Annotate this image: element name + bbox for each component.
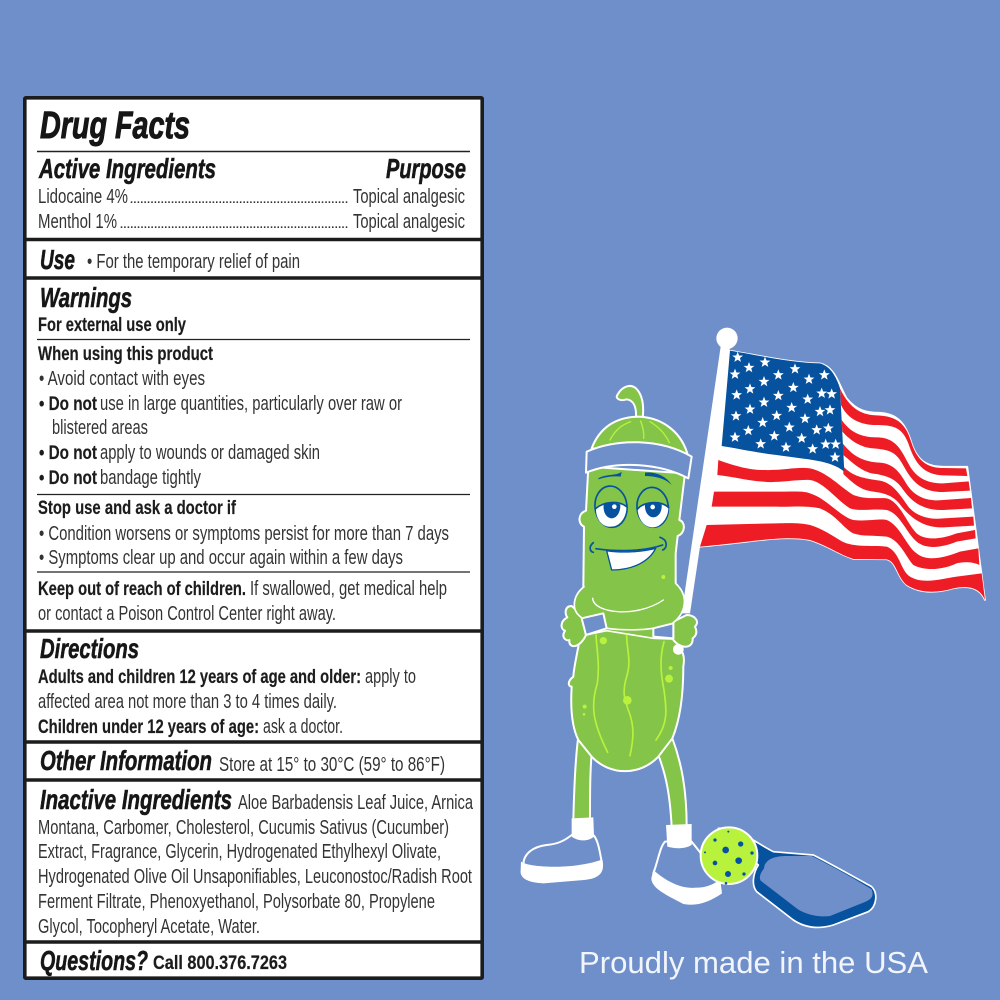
section: directions: Children under 12 years of age: — [38, 716, 259, 738]
panel: drug facts label — [25, 98, 482, 978]
section: warnings: If swallowed, get medical help — [250, 578, 447, 600]
section: directions: ask a doctor. — [263, 716, 343, 738]
flag pole — [682, 347, 730, 613]
waist line — [586, 631, 673, 639]
section: questions: Call 800.376.7263 — [153, 952, 287, 974]
left eye — [593, 484, 629, 529]
pickle body seams and spots — [583, 635, 673, 756]
section: active ingredients: Lidocaine 4% — [38, 186, 128, 208]
illustration: pickle character upper body — [562, 386, 697, 771]
section: warnings: Warnings — [40, 282, 132, 313]
section: directions: affected area not more than 3 to 4 times daily. — [38, 691, 337, 713]
headband — [586, 442, 692, 478]
pickleball paddle — [718, 828, 876, 927]
section: directions: Adults and children 12 years of age and older: — [38, 666, 361, 688]
flag canton with stars — [722, 351, 844, 472]
section: inactive ingredients: Montana, Carbomer, Cholesterol, Cucumis Sativus (Cucumber) — [38, 817, 449, 839]
section: warnings: blistered areas — [52, 417, 148, 439]
left eyebrow — [598, 472, 622, 479]
body spot — [661, 575, 665, 579]
section: warnings: • Do not — [39, 467, 97, 489]
heading: Drug Facts: Drug Facts — [40, 105, 190, 147]
left wristband — [582, 613, 607, 635]
section: other information — [40, 745, 445, 776]
section: other information: Other Information — [40, 745, 212, 776]
section: warnings: • Do not — [39, 393, 97, 415]
right hand — [673, 615, 697, 647]
pole grip — [673, 644, 684, 655]
section: use: • For the temporary relief of pain — [87, 251, 300, 273]
pickle cap — [592, 417, 687, 453]
right eye — [635, 486, 670, 529]
pole finial — [716, 328, 738, 349]
left hand — [562, 606, 586, 646]
section: active ingredients: Active Ingredients — [38, 153, 216, 184]
section: warnings: When using this product — [38, 343, 213, 365]
section: other information: Store at 15° to 30°C (59° to 86°F) — [219, 754, 445, 776]
cap seam lines — [610, 421, 669, 443]
section: active ingredients — [38, 153, 466, 233]
right wristband — [653, 623, 673, 638]
section: warnings: or contact a Poison Control Center right away. — [38, 603, 336, 625]
section: warnings: • Do not — [39, 442, 97, 464]
section: active ingredients: Topical analgesic — [353, 186, 465, 208]
section: active ingredients: Purpose — [386, 153, 466, 184]
left shoe — [521, 817, 603, 883]
section: active ingredients: Topical analgesic — [353, 211, 465, 233]
smile — [590, 537, 666, 570]
section: directions: Directions — [40, 633, 139, 664]
section: use: Use — [40, 244, 75, 275]
section: warnings: Keep out of reach of children. — [38, 578, 246, 600]
section: questions: Questions? — [40, 945, 148, 976]
section: inactive ingredients: Inactive Ingredients — [40, 784, 232, 815]
section: inactive ingredients: Glycol, Tocopheryl Acetate, Water. — [38, 916, 260, 938]
caption: Proudly made in the USA — [579, 945, 928, 980]
pickleball — [701, 827, 757, 885]
section: inactive ingredients: Ferment Filtrate, Phenoxyethanol, Polysorbate 80, Propylene — [38, 891, 435, 913]
flag red stripes — [700, 388, 985, 600]
section: warnings: apply to wounds or damaged skin — [100, 442, 320, 464]
section: active ingredients: ................................................................ — [130, 194, 348, 206]
right leg — [658, 738, 687, 827]
left leg — [573, 737, 592, 820]
section: active ingredients: ................................................................... — [120, 219, 348, 231]
arm outlines — [574, 583, 684, 630]
section: active ingredients: Menthol 1% — [38, 211, 117, 233]
crossed arms — [574, 583, 684, 639]
section: questions — [40, 945, 287, 976]
section: inactive ingredients: Aloe Barbadensis Leaf Juice, Arnica — [238, 792, 474, 814]
right shoe — [651, 824, 722, 905]
illustration: American flag on pole — [682, 328, 985, 613]
section: warnings: For external use only — [38, 314, 186, 336]
section: directions — [38, 633, 416, 738]
section: warnings: • Avoid contact with eyes — [39, 368, 205, 390]
section: directions: apply to — [365, 666, 416, 688]
section: warnings: use in large quantities, particularly over raw or — [100, 393, 402, 415]
pickle body — [569, 467, 685, 771]
section: inactive ingredients: Extract, Fragrance, Glycerin, Hydrogenated Ethylhexyl Olivate, — [38, 841, 441, 863]
section: warnings — [37, 282, 470, 625]
section: warnings: • Symptoms clear up and occur again within a few days — [39, 547, 403, 569]
section: warnings: bandage tightly — [100, 467, 201, 489]
flag white field — [700, 351, 985, 600]
right eyebrow — [645, 473, 672, 485]
illustration: pickle legs and shoes — [521, 737, 876, 927]
section: inactive ingredients — [38, 784, 474, 938]
section: warnings: • Condition worsens or symptoms persist for more than 7 days — [39, 523, 449, 545]
section: warnings: Stop use and ask a doctor if — [38, 497, 236, 519]
pickle stem — [617, 386, 643, 418]
section: use — [40, 244, 300, 275]
section: inactive ingredients: Hydrogenated Olive Oil Unsaponifiables, Leuconostoc/Radish Root — [38, 866, 472, 888]
